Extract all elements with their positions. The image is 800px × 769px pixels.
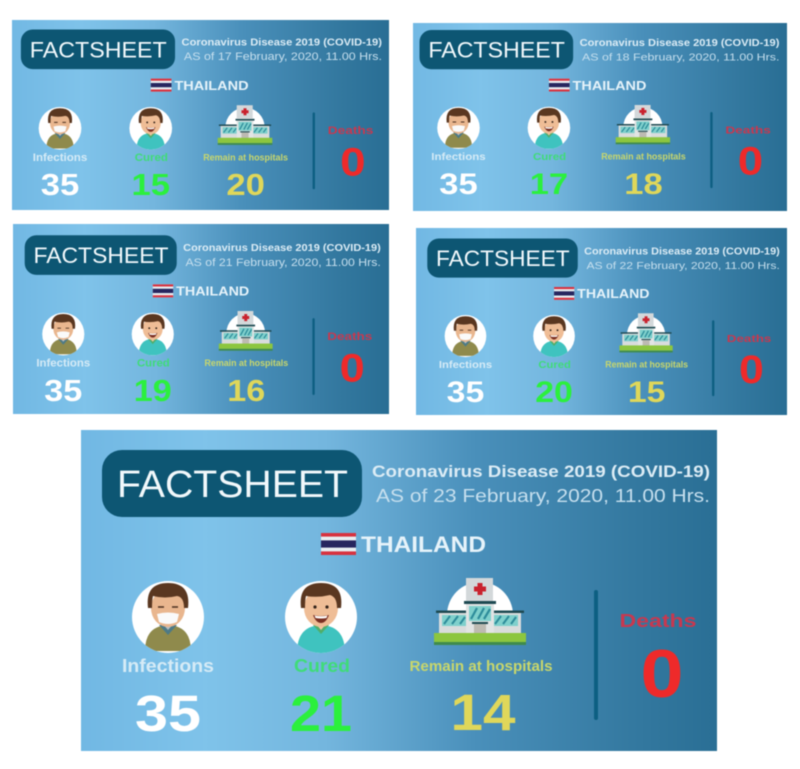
label: remain at hospitals: Remain at hospitals [204,152,288,162]
number: infections: 35 [44,374,82,408]
label: infections: Infections [33,152,88,164]
label: remain at hospitals: Remain at hospitals [601,151,686,161]
number: cured: 21 [290,685,352,742]
label: cured: Cured [538,360,570,371]
icon: Thai flag [554,286,574,299]
icon: masked man [39,107,82,150]
label: remain at hospitals: Remain at hospitals [204,358,288,368]
number: deaths: 0 [738,140,763,184]
icon: smiling man [130,107,172,150]
label: infections: Infections [36,357,90,369]
text: report date: AS of 23 February, 2020, 11.00 Hrs. [376,486,710,506]
heading badge: FACTSHEET [21,29,175,69]
heading badge: FACTSHEET: FACTSHEET [435,245,569,270]
number: infections: 35 [41,169,80,202]
icon: masked man [42,312,84,355]
number: deaths: 0 [339,346,364,390]
label: deaths: Deaths [620,611,696,631]
number: cured: 19 [133,374,171,408]
number: deaths: 0 [640,636,684,712]
number: cured: 17 [530,168,568,201]
panel: factsheet 18 February [412,22,788,212]
icon: Thai flag [151,79,172,92]
icon: Thai flag [321,533,356,555]
number: remain at hospitals: 14 [450,684,516,741]
text: report date: AS of 21 February, 2020, 11.00 Hrs. [185,256,380,269]
icon: masked man [444,315,486,357]
heading badge: FACTSHEET: FACTSHEET [117,464,348,506]
icon: hospital [434,578,526,648]
icon: Thai flag [152,284,173,297]
number: remain at hospitals: 15 [627,375,665,409]
panel: factsheet 22 February [415,227,788,416]
number: infections: 35 [439,168,478,201]
label: cured: Cured [136,357,169,369]
heading badge: FACTSHEET: FACTSHEET [33,242,168,268]
label: deaths: Deaths [327,330,372,343]
text: report date: AS of 17 February, 2020, 11.00 Hrs. [184,51,382,63]
heading badge: FACTSHEET [102,450,362,517]
number: remain at hospitals: 16 [227,374,265,408]
label: infections: Infections [122,656,214,676]
number: infections: 35 [446,375,484,409]
text: disease title: Coronavirus Disease 2019 (COVID-19) [584,246,779,257]
number: infections: 35 [135,685,201,742]
text: country: THAILAND [175,78,249,93]
heading badge: FACTSHEET: FACTSHEET [428,38,565,63]
icon: masked man [132,581,204,653]
heading badge: FACTSHEET: FACTSHEET [30,37,167,62]
label: deaths: Deaths [328,125,374,137]
text: disease title: Coronavirus Disease 2019 (COVID-19) [372,462,710,481]
text: disease title: Coronavirus Disease 2019 (COVID-19) [182,37,382,48]
label: remain at hospitals: Remain at hospitals [605,359,688,369]
label: deaths: Deaths [725,125,771,137]
panel: factsheet 21 February [12,223,390,415]
label: cured: Cured [135,152,168,164]
icon: smiling man [285,581,357,653]
icon: smiling man [528,107,570,149]
number: cured: 15 [132,169,170,202]
icon: hospital [616,105,670,146]
icon: smiling man [131,312,173,355]
label: infections: Infections [431,151,486,163]
number: remain at hospitals: 20 [227,169,265,202]
icon: masked man [437,107,480,149]
label: cured: Cured [294,656,350,676]
icon: hospital [218,105,273,147]
text: country: THAILAND [361,532,486,557]
icon: hospital [218,311,272,352]
text: country: THAILAND [573,78,646,93]
text: disease title: Coronavirus Disease 2019 (COVID-19) [183,243,380,254]
heading badge: FACTSHEET [24,235,176,274]
number: cured: 20 [535,375,572,409]
text: country: THAILAND [577,286,649,301]
heading badge: FACTSHEET [427,238,577,277]
icon: hospital [619,313,672,354]
icon: Thai flag [549,79,570,92]
text: report date: AS of 18 February, 2020, 11.00 Hrs. [582,52,779,63]
text: report date: AS of 22 February, 2020, 11.00 Hrs. [586,260,779,271]
number: deaths: 0 [738,347,763,391]
label: remain at hospitals: Remain at hospitals [410,658,552,675]
panel: factsheet 23 February [80,429,718,752]
panel: factsheet 17 February [11,19,390,211]
label: infections: Infections [438,360,492,371]
label: cured: Cured [533,151,566,163]
heading badge: FACTSHEET [420,30,573,69]
text: country: THAILAND [176,283,249,298]
label: deaths: Deaths [726,333,771,344]
text: disease title: Coronavirus Disease 2019 (COVID-19) [580,38,779,49]
number: remain at hospitals: 18 [624,168,663,201]
icon: smiling man [533,315,574,357]
number: deaths: 0 [340,140,366,185]
